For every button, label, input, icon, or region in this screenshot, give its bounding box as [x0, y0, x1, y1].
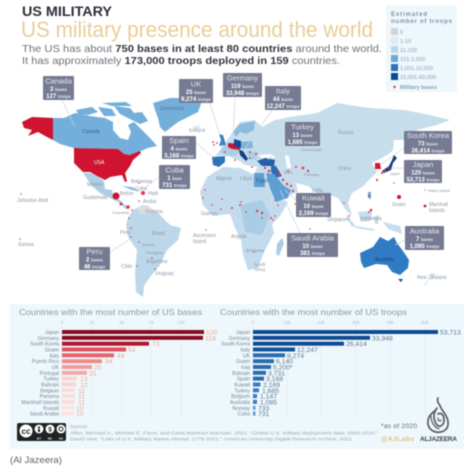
country labels: Aruba	[143, 199, 157, 205]
region: Central Africa shading	[240, 200, 270, 235]
callout: Germany	[223, 73, 262, 97]
country labels: Colombia	[112, 210, 130, 215]
callout: Japan: 120 bases	[411, 170, 435, 176]
country labels: Kazakhstan	[301, 147, 322, 152]
bar chart: bases: Japan	[45, 330, 59, 336]
bar chart: troops: 26,414	[346, 341, 367, 348]
region: Italy	[239, 150, 248, 161]
country labels: Russia	[338, 130, 354, 136]
bar chart: troops: Japan	[236, 330, 250, 336]
bar chart: bases: 12	[80, 382, 88, 389]
country labels: Chile	[121, 264, 133, 270]
icon: Creative Commons licence badge: BY	[37, 436, 41, 440]
callout: Canada: Canada	[45, 76, 73, 86]
country labels: Egypt	[256, 178, 269, 184]
legend	[386, 5, 457, 92]
country labels: Africa	[254, 267, 266, 272]
logo wordmark: Al Jazeera: ALJAZEERA	[420, 436, 457, 443]
legend: Estimated	[391, 12, 427, 18]
world map	[17, 97, 450, 297]
eyebrow heading: US MILITARY	[22, 4, 112, 19]
country labels: Algeria	[216, 176, 232, 182]
region: Western Europe	[220, 142, 242, 156]
region: Germany	[228, 143, 240, 150]
callout: Saudi Arabia: 10 bases	[302, 244, 323, 250]
bar chart: bases	[22, 320, 218, 418]
bar chart: bases: UK	[52, 365, 60, 371]
country labels: Japan	[390, 172, 400, 176]
bar chart: bases: Germany	[38, 336, 59, 342]
country labels: Iran	[284, 170, 293, 176]
bar chart: troops: South Korea	[221, 342, 250, 348]
bar chart: troops: Spain	[237, 377, 250, 383]
bar chart: troops: 10k	[283, 320, 291, 325]
callout: Japan: Japan	[413, 160, 433, 169]
bar chart: troops: Bahrain	[232, 371, 250, 377]
bar chart: troops: Turkey	[234, 388, 250, 394]
region: Mexico and Central America	[83, 173, 128, 209]
country labels: Islands	[429, 208, 445, 214]
bar chart: troops	[221, 320, 461, 418]
legend: Military bases	[400, 85, 437, 91]
country labels: Paraguay	[146, 250, 163, 255]
callout: UK: 9,274 troops	[181, 97, 212, 103]
callout: Germany: 119 bases	[231, 84, 255, 90]
callout: Italy	[265, 86, 301, 110]
region: Saudi Arabia	[266, 173, 291, 202]
bar chart: bases: 120	[206, 330, 218, 336]
country labels: New Zealand	[417, 275, 447, 281]
region: Korea	[375, 163, 381, 169]
country labels: Haiti	[148, 191, 158, 197]
bar chart: bases: 0	[61, 320, 64, 325]
country labels: Guatemala	[83, 195, 108, 201]
callout: Australia: 7 bases	[416, 237, 434, 243]
callout: UK: 25 bases	[186, 90, 207, 96]
country labels: Angola	[231, 234, 247, 240]
country labels: India	[312, 188, 323, 194]
bar chart: bases: 44	[117, 353, 125, 360]
country labels: Libya	[240, 176, 252, 182]
bar chart: bases: 21	[89, 370, 97, 377]
bar chart: troops: 733	[258, 405, 270, 412]
region: Africa	[200, 167, 288, 270]
sources text: Allen, Michael A., Michael E. Flynn, and Carla Martinez Machain. 2021. "Global U.S. military deployment data: 1950-2020."	[70, 430, 378, 436]
region: Arctic islands	[76, 102, 148, 124]
bar chart: troops: Italy	[240, 348, 250, 354]
bar chart: troops: 5,200*	[273, 364, 293, 372]
legend: 1-10	[400, 39, 411, 45]
heading: bases chart: Countries with the most number of US bases	[19, 308, 202, 317]
region: South America	[126, 205, 181, 297]
region: Eurasia	[215, 103, 450, 216]
callout: Canada: 127 troops	[46, 94, 72, 100]
bar chart: troops: 1,147	[260, 394, 277, 401]
bar chart: troops: 2,169	[263, 382, 280, 389]
callout: Saudi Arabia	[287, 233, 338, 257]
bar chart: troops: Germany	[229, 336, 250, 342]
bar chart: troops: Australia	[230, 400, 250, 406]
bar chart: troops: Guam	[236, 359, 250, 365]
sources text: David Vine, "Lists of U.S. Military Bases Abroad, 1776-2021." American University Digital Research Archive, 2021	[70, 436, 353, 442]
bar chart: bases: 119	[205, 335, 216, 342]
country labels: Canada	[82, 129, 100, 135]
icon: Creative Commons licence badge: SA	[59, 436, 64, 440]
bar chart: troops: 3,168	[266, 376, 283, 383]
callout: Peru: 46 troops	[84, 264, 106, 270]
bar chart: bases: 73	[152, 341, 160, 348]
icon: Creative Commons licence badge: $	[48, 426, 52, 434]
bar chart: bases: South Korea	[30, 342, 59, 348]
country labels: Brazil	[152, 231, 165, 237]
country labels: Greenland	[160, 106, 184, 112]
sources text	[70, 424, 378, 442]
bar chart: bases: Panama	[40, 394, 59, 400]
bar chart: troops: 3,731	[268, 370, 285, 377]
callout: Italy: 44 bases	[273, 97, 294, 103]
bar chart: troops: 30k	[352, 320, 360, 325]
bar chart: bases: 50	[119, 320, 125, 325]
country labels: Iceland	[189, 128, 205, 134]
bar chart: troops: 1,085	[260, 399, 277, 406]
bar chart: troops: 9,274	[287, 353, 304, 360]
callout: Saudi Arabia: 381 troops	[300, 251, 326, 257]
callout: Turkey: 13 bases	[292, 133, 313, 139]
country labels: Indonesia	[360, 216, 382, 222]
callout: South Korea	[404, 131, 452, 154]
country labels: Johnston Atoll	[17, 198, 48, 204]
bar chart: bases: 10	[76, 405, 84, 412]
callout: Canada: 3 bases	[50, 87, 68, 93]
callout: Kuwait: 2,169 troops	[299, 211, 329, 217]
icon: Creative Commons licence badge	[17, 423, 66, 441]
bar chart: troops: Cuba	[238, 412, 250, 418]
region: Spain	[212, 156, 225, 167]
bar chart: bases: Kuwait	[43, 406, 60, 412]
country labels: China	[338, 166, 351, 172]
callout: Saudi Arabia: Saudi Arabia	[291, 234, 335, 242]
callout: South Korea: 26,414 troops	[411, 148, 445, 154]
bar chart: bases: 34	[105, 359, 113, 366]
bar chart: bases: 100	[177, 320, 185, 325]
country labels: Pakistan	[304, 172, 319, 177]
intro text: The US has about 750 bases in at least 80 countries around the world.	[22, 44, 382, 55]
country labels: Uruguay	[155, 271, 174, 277]
bar chart: troops: 6,140	[276, 359, 293, 366]
bar chart: bases: 11	[78, 388, 85, 395]
callout: Spain: 4 bases	[171, 146, 188, 152]
country labels: Bahamas	[131, 179, 153, 185]
icon: Creative Commons licence badge: cc	[22, 427, 31, 436]
country labels: Botswana	[246, 248, 265, 253]
country labels: Ascension	[193, 233, 216, 239]
callout: South Korea: South Korea	[407, 131, 450, 140]
bar chart: troops: 33,948	[372, 335, 393, 342]
region: Philippines	[368, 192, 371, 199]
callout: Kuwait: Kuwait	[302, 194, 326, 202]
country labels: South	[254, 262, 266, 267]
bar chart: bases: 25	[94, 364, 102, 372]
sources text: Sources:	[70, 424, 88, 429]
bar chart: bases: 11	[78, 394, 85, 401]
bar chart: bases: Belgium	[40, 388, 59, 394]
bar chart: troops: Kuwait	[234, 382, 251, 388]
callout: Germany: 33,948 troops	[226, 91, 260, 97]
leader lines	[62, 97, 405, 252]
icon: Creative Commons licence badge: NC	[48, 436, 53, 440]
country labels: Peru	[120, 230, 131, 236]
callout: Kuwait	[296, 193, 331, 217]
region: Iraq and Syria	[271, 165, 282, 178]
bar chart: troops: 20k	[317, 320, 325, 325]
region: contiguous USA	[74, 148, 141, 182]
callout: Canada	[43, 76, 74, 100]
region: Canada mainland	[53, 113, 157, 155]
region: Alaska	[22, 117, 53, 140]
legend: 1,001-10,000	[400, 66, 433, 72]
country labels: Argentina	[146, 259, 168, 265]
bar chart: bases: Bahrain	[41, 382, 59, 388]
country labels	[17, 106, 450, 281]
country labels: Singapore	[327, 217, 350, 223]
callout: Peru: Peru	[86, 247, 103, 256]
country labels: Island	[193, 239, 207, 245]
callout: Turkey: 1,685 troops	[288, 140, 318, 146]
region: Scandinavia	[233, 121, 255, 137]
callout: Italy: Italy	[276, 86, 290, 96]
bar chart: bases: 13	[80, 376, 88, 383]
bar chart: bases: 25	[89, 320, 95, 325]
bar chart: bases: 10	[76, 411, 84, 418]
bar chart: bases: Puerto Rico	[32, 359, 59, 365]
callout: Australia: 1,085 troops	[410, 244, 440, 250]
footnote: *as of 2020	[381, 423, 417, 430]
callout: Spain: 3,168 troops	[164, 154, 195, 160]
callout: Cuba: 731 troops	[162, 183, 188, 189]
country labels: Australia	[375, 257, 395, 263]
legend: number of troops	[391, 19, 453, 25]
source caption: (Al Jazeera)	[10, 455, 62, 466]
bar chart: troops: 0	[252, 320, 255, 325]
callout: Italy: 12,247 troops	[266, 104, 300, 110]
country labels: Guinea	[201, 211, 217, 217]
callout: Australia	[405, 226, 444, 250]
bar chart: bases: Saudi Arabia	[30, 412, 59, 418]
region: Guyana Venezuela	[137, 205, 158, 214]
region: New Zealand	[424, 273, 436, 285]
callout: UK	[179, 79, 213, 103]
region: Madagascar	[276, 238, 284, 256]
region: Tasmania	[398, 279, 403, 282]
region: Germany dark	[234, 139, 241, 148]
callout: Cuba: 1 base	[167, 176, 182, 182]
country labels: Cuba	[135, 186, 147, 192]
region: Caribbean	[122, 186, 141, 192]
bar chart: bases: 11	[78, 399, 85, 406]
country labels: USA	[94, 160, 105, 166]
callout: Japan	[404, 160, 442, 184]
country labels: Samoa	[18, 242, 34, 248]
callout: Turkey: Turkey	[291, 122, 314, 132]
bar chart: bases: Guam	[45, 348, 59, 354]
bar chart: troops: 50k	[421, 320, 429, 325]
bar chart: bases: 75	[148, 320, 154, 325]
panel: charts and credits	[10, 304, 464, 449]
region: UK	[219, 134, 226, 146]
callout: Japan: 53,713 troops	[406, 178, 440, 184]
region: Black Sea	[258, 154, 275, 158]
region: Indonesia	[345, 211, 402, 234]
callout: Spain: Spain	[169, 136, 189, 145]
country labels: Marshall	[429, 202, 448, 208]
callout: Peru: 2 bases	[86, 258, 104, 264]
bar chart: bases: Italy	[49, 353, 59, 359]
callout: Peru	[79, 247, 110, 270]
callout: Spain	[162, 136, 196, 160]
icon: Al Jazeera logo	[428, 398, 448, 432]
country labels: Wake Island	[428, 188, 450, 193]
region: Turkey	[257, 158, 275, 166]
region: Egypt	[254, 173, 265, 187]
bar chart: troops: Iraq	[241, 365, 250, 371]
country labels: Belize	[120, 191, 134, 197]
bar chart: troops: 40k	[386, 320, 394, 325]
legend: 11-100	[400, 48, 417, 54]
bar chart: troops: 1,685	[262, 388, 279, 395]
title: US military presence around the world	[21, 17, 373, 42]
callout: Cuba: Cuba	[165, 166, 184, 174]
region: Iceland	[192, 125, 201, 130]
callout: Australia: Australia	[410, 226, 440, 236]
region: Australia	[360, 237, 409, 275]
credit: AJLabs: @AJLabs	[381, 436, 414, 443]
region: Greenland	[153, 98, 202, 132]
callout: Turkey	[285, 122, 320, 146]
country labels: Bolivia	[142, 242, 155, 247]
country labels: Mexico	[87, 182, 103, 188]
bar chart: bases: Portugal	[40, 371, 59, 377]
callout: Germany: Germany	[227, 74, 258, 82]
intro text: It has approximately 173,000 troops deployed in 159 countries.	[22, 56, 340, 67]
region: South Korea and Japan	[382, 155, 397, 173]
region: Balkans	[246, 151, 258, 160]
legend: 101-1,000	[400, 57, 425, 63]
military base markers	[19, 141, 426, 270]
bar chart: troops: Belgium	[231, 394, 250, 400]
country labels: Guyana	[145, 209, 163, 215]
legend: 10,001-60,000	[400, 75, 436, 81]
intro text	[22, 44, 382, 67]
bar chart: troops: 731	[258, 411, 270, 418]
bar chart: troops: Norway	[232, 406, 250, 412]
region: Eastern Europe	[240, 141, 253, 149]
callout: Kuwait: 10 bases	[303, 204, 324, 210]
bar chart: troops: 53,713	[440, 330, 461, 336]
region: Caspian Sea	[285, 155, 291, 168]
callout: Cuba	[159, 165, 190, 189]
bar chart: troops: 12,247	[297, 347, 318, 354]
bar chart: bases: Turkey	[43, 377, 59, 383]
callout: UK: UK	[191, 80, 201, 88]
callout: South Korea: 73 bases	[418, 142, 439, 148]
bar chart: troops: UK	[243, 353, 251, 359]
heading: troops chart: Countries with the most number of US troops	[220, 308, 407, 317]
bar chart: bases: 54	[128, 347, 136, 354]
country labels: Guam	[392, 202, 406, 208]
bar chart: bases: Marshall Islands	[22, 400, 59, 406]
legend: 0	[400, 30, 403, 36]
